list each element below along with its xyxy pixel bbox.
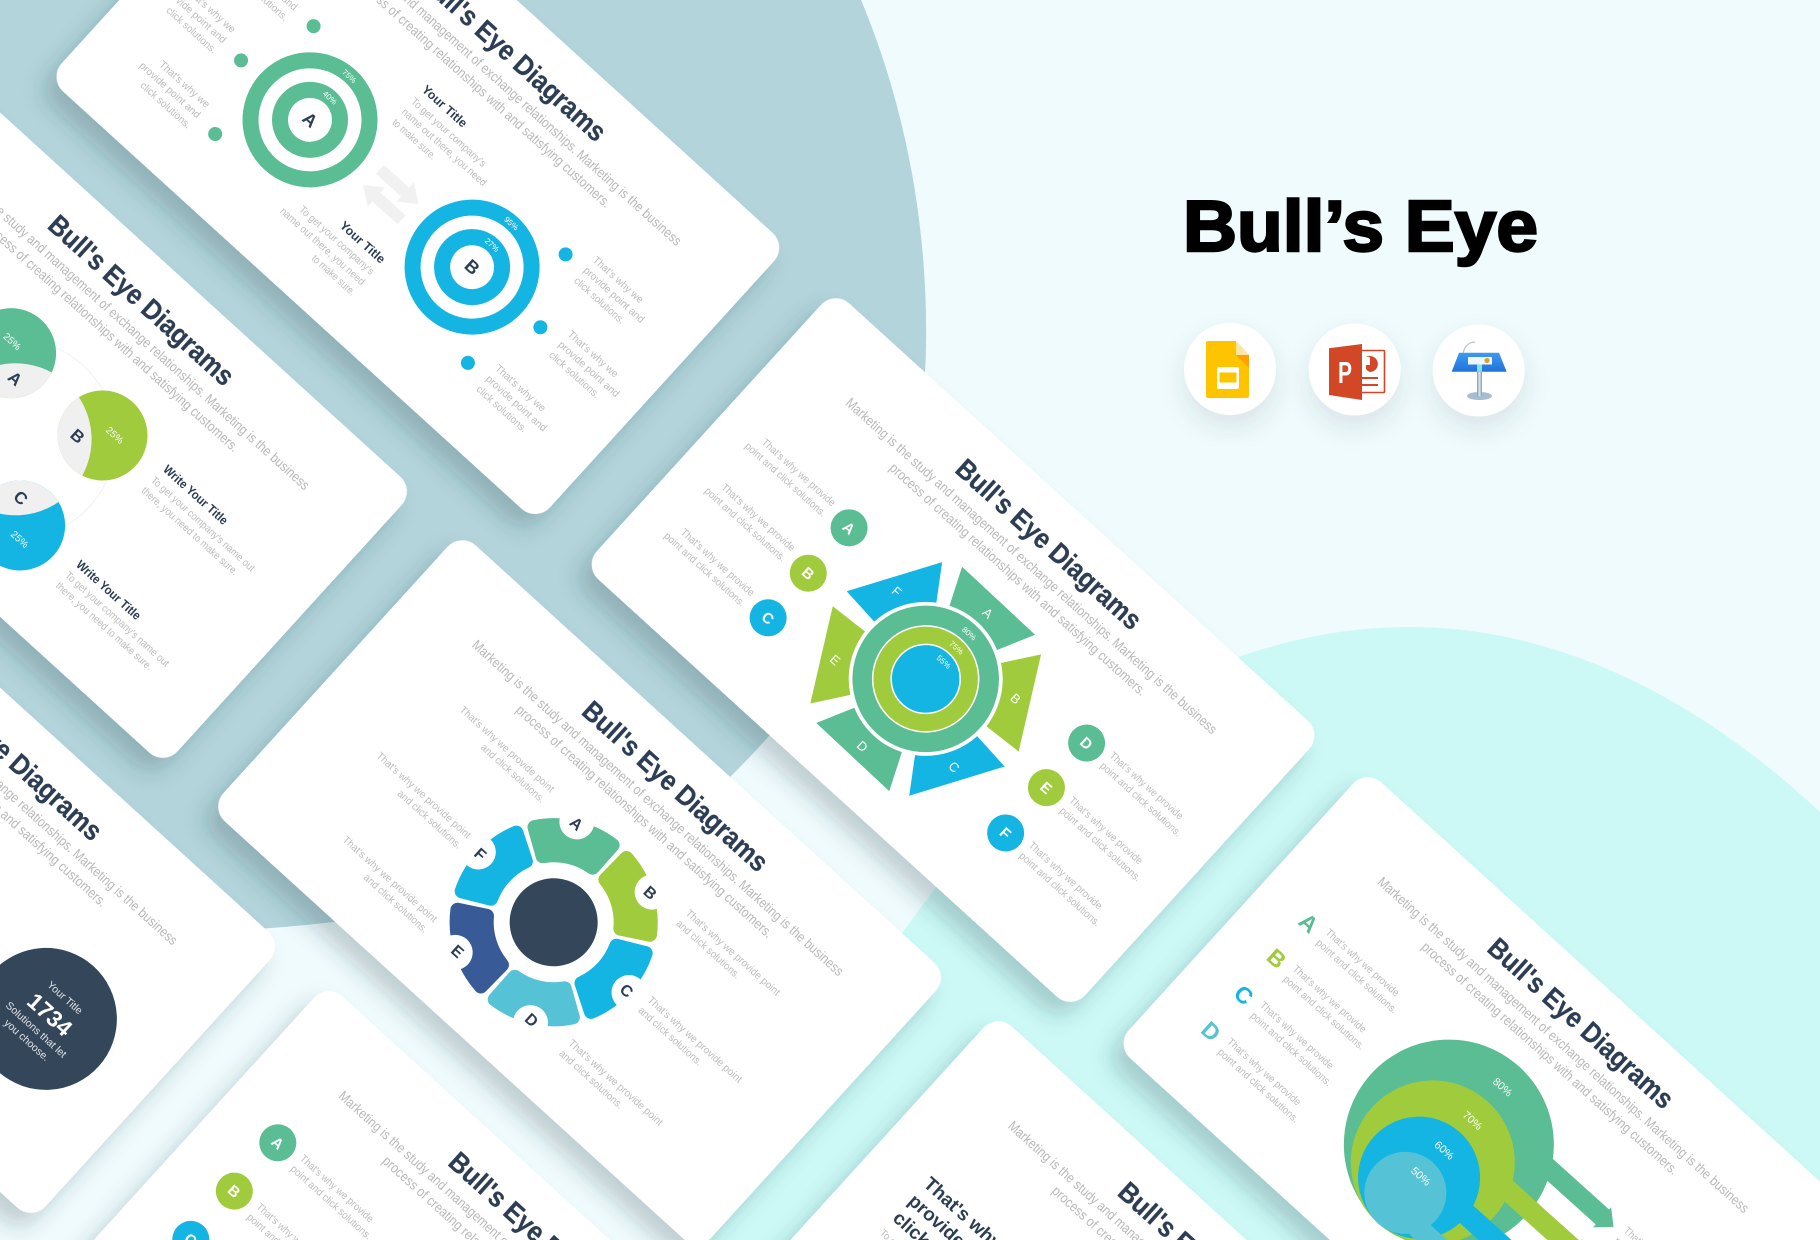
right text blocks: click solutions. <box>571 275 627 327</box>
write your title 2: To get your company's name out <box>63 570 172 670</box>
left text blocks: provide point and <box>137 60 203 121</box>
sunburst chart: A <box>979 605 996 622</box>
pie B: 25% <box>103 425 125 447</box>
right text blocks: provide point and <box>581 265 647 326</box>
sunburst chart: 55% <box>935 653 953 671</box>
ring diagram: A <box>566 814 586 835</box>
right text blocks <box>556 907 805 1159</box>
slide subtitle: Marketing is the study and management of exchange relationships. Marketing is the business <box>469 637 847 979</box>
badge A <box>823 502 875 554</box>
right text blocks: provide point and <box>556 339 622 400</box>
panel: slide with pie circles <box>0 112 407 778</box>
left text blocks: That's why we provide <box>719 482 797 554</box>
panel: slide with two targets <box>46 0 790 524</box>
card background <box>1115 769 1820 1240</box>
badge B <box>208 1165 260 1217</box>
right text blocks: That's why we <box>565 328 621 380</box>
callout: your title left: name out there, you need <box>277 205 367 288</box>
ring diagram <box>392 762 715 1083</box>
right text blocks: point and click solutions. <box>1057 805 1143 884</box>
right text blocks: That's why we provide <box>1066 795 1145 867</box>
callout: your title left: To get your company's <box>296 204 377 277</box>
right text blocks: That's why we provide <box>1107 750 1186 822</box>
card background <box>210 532 949 1240</box>
icon: powerpoint: P <box>1338 355 1352 390</box>
left text blocks: point and click solutions. <box>742 440 828 519</box>
left text blocks: That's why we provide <box>759 437 838 509</box>
right text blocks: click solutions. <box>474 383 529 435</box>
legend text: point and click solutions. <box>1248 1010 1334 1089</box>
right text blocks: and click solutions. <box>636 1005 705 1068</box>
right text blocks: provide point and <box>483 373 549 434</box>
left text blocks: point and click solutions. <box>702 485 788 564</box>
left text blocks: point and click solutions. <box>661 530 747 609</box>
right text blocks: That's why we provide point <box>683 907 782 999</box>
panel: slide with nested circles and arrows <box>1113 768 1820 1240</box>
slide title: Bull's Eye Diagrams <box>1482 932 1680 1115</box>
right text blocks: point and click solutions. <box>1017 850 1103 929</box>
blue dots <box>458 245 598 393</box>
right text blocks: click solutions. <box>546 349 602 401</box>
slide subtitle: Marketing is the study and management of exchange relationships. Marketing is the business <box>843 395 1221 737</box>
badge text blocks: That's why we provide <box>297 1153 376 1225</box>
legend text: That's why we provide <box>1323 927 1402 999</box>
callout: your title left: to make sure. <box>309 253 358 298</box>
left text blocks <box>308 683 557 936</box>
faint ring <box>0 298 157 581</box>
card background <box>48 0 787 522</box>
badge A: A <box>267 1134 287 1154</box>
badge B: B <box>224 1182 243 1202</box>
panel: slide with sunburst diagram <box>581 289 1325 1011</box>
card background <box>0 46 415 766</box>
right text blocks <box>474 254 679 465</box>
target B: 95% <box>502 215 520 232</box>
left text blocks: and click solutions. <box>361 872 430 936</box>
badge F: F <box>996 824 1014 843</box>
write your title 2: there, you need to make sure. <box>53 580 155 673</box>
slide title: Bull's Eye Diagrams <box>950 453 1148 636</box>
legend text: That's why we provide <box>1224 1036 1303 1108</box>
large callout <box>877 1174 1052 1240</box>
badge A <box>252 1117 304 1169</box>
badge B <box>782 547 834 599</box>
right text blocks: That's why we <box>492 363 548 414</box>
write your title 1: there, you need to make sure. <box>139 485 240 578</box>
target A: 75% <box>340 68 358 85</box>
slide subtitle <box>0 606 181 962</box>
callout: your title left <box>268 182 388 298</box>
pie A: A <box>4 368 26 390</box>
sunburst chart: 80% <box>960 625 978 643</box>
target A: A <box>298 108 322 132</box>
right text blocks: That's why we provide point <box>566 1037 665 1129</box>
background blob: mint <box>700 627 1820 1240</box>
callout: your title left: Your Title <box>337 218 388 266</box>
stat circle <box>0 919 146 1119</box>
icon: powerpoint <box>1309 324 1401 416</box>
left text blocks: and click solutions. <box>478 742 547 805</box>
pie B: B <box>66 425 88 448</box>
badge E <box>1020 762 1073 814</box>
right text blocks: and click solutions. <box>556 1048 625 1112</box>
legend letters: C <box>1229 980 1259 1010</box>
card background <box>76 983 816 1240</box>
green dots <box>183 0 323 145</box>
slide subtitle: process of creating relationships with and satisfying customers. <box>513 701 776 941</box>
slide title: Bull's Eye Diagrams <box>576 695 775 878</box>
stat circle: you choose. <box>1 1017 52 1064</box>
panel: slide with dark stat circle <box>0 500 285 1222</box>
legend letters: A <box>1294 908 1324 938</box>
sunburst chart: F <box>889 583 905 600</box>
write your title 1: Write Your Title <box>160 462 231 528</box>
nested circle chart with arrows: 60% <box>1432 1139 1456 1163</box>
nested circle chart with arrows: 70% <box>1460 1109 1484 1133</box>
stat circle: 1734 <box>22 988 78 1041</box>
pie B <box>58 390 148 480</box>
nested circle chart with arrows <box>1300 996 1651 1240</box>
callout: your title right <box>390 82 510 199</box>
stat circle: Solutions that let <box>3 1000 69 1061</box>
callout: your title right: To get your company's <box>408 96 488 170</box>
panel: slide with lettered badges bottom <box>74 982 818 1240</box>
ring diagram: C <box>616 981 636 1002</box>
badge B: B <box>798 564 817 584</box>
badge F <box>980 807 1032 859</box>
background blob: teal circle <box>0 0 926 945</box>
left text blocks: and click solutions. <box>395 788 464 852</box>
legend letters: B <box>1262 943 1291 974</box>
right text blocks: point and click solutions. <box>1098 760 1184 839</box>
badge text blocks <box>201 1153 383 1240</box>
arrows between targets <box>354 158 427 231</box>
left text blocks: click solutions. <box>164 5 219 56</box>
sunburst chart: 75% <box>947 639 965 657</box>
sunburst chart: B <box>1007 690 1024 707</box>
card background <box>583 290 1323 1010</box>
pie C <box>0 480 66 570</box>
legend letters <box>1196 908 1324 1047</box>
target B: 27% <box>483 236 501 254</box>
panel: slide with gear ring diagram <box>208 531 951 1240</box>
slide subtitle: process of creating relationships with and satisfying customers. <box>886 459 1150 699</box>
left text blocks: click solutions. <box>138 80 193 131</box>
badge E: E <box>1036 779 1055 798</box>
pie A: 25% <box>0 331 23 353</box>
main title: Bull’s Eye <box>1183 187 1538 267</box>
card background <box>746 1013 1485 1240</box>
badge C <box>742 592 794 644</box>
pie C: C <box>10 487 31 509</box>
legend text: point and click solutions. <box>1313 937 1400 1016</box>
ring diagram: E <box>447 942 467 962</box>
legend text: point and click solutions. <box>1281 973 1367 1053</box>
legend letters: D <box>1196 1016 1226 1047</box>
legend text: That's why we provide <box>1257 999 1336 1072</box>
pie C: 25% <box>8 529 30 551</box>
callout: your title right: to make sure. <box>390 117 439 162</box>
badge C <box>165 1213 217 1240</box>
icon: google slides <box>1184 323 1276 415</box>
target A <box>215 25 405 215</box>
icon: keynote <box>1433 324 1525 416</box>
left text blocks: That's why we provide point <box>457 704 557 795</box>
nested circle chart with arrows: 50% <box>1408 1165 1433 1189</box>
badge C: C <box>758 609 777 629</box>
callout: your title right: Your Title <box>419 82 470 130</box>
panel: slide with large callout text bottom <box>744 1012 1487 1240</box>
sunburst chart: D <box>854 738 871 755</box>
right text blocks <box>1017 750 1193 929</box>
badge D <box>1060 717 1113 769</box>
left text blocks: That's why we provide point <box>340 834 439 925</box>
badge A: A <box>839 519 858 539</box>
badge D: D <box>1076 734 1096 754</box>
slide subtitle: process of creating relationships with and satisfying customers. <box>1418 938 1682 1178</box>
left text blocks: That's why we provide <box>678 526 757 599</box>
ring diagram: D <box>521 1011 541 1031</box>
sunburst chart: E <box>827 651 844 669</box>
nested circle chart with arrows: 80% <box>1490 1076 1515 1100</box>
right text blocks: That's why we <box>590 254 646 306</box>
card background <box>0 501 283 1221</box>
legend text: point and click solutions. <box>1215 1046 1301 1125</box>
ring diagram: F <box>470 845 489 865</box>
write your title 2: Write Your Title <box>73 558 144 623</box>
legend text <box>1215 927 1409 1125</box>
sunburst chart: C <box>946 758 963 776</box>
left text blocks <box>661 430 838 609</box>
pie A <box>0 308 56 398</box>
ring diagram: B <box>640 883 660 904</box>
stat circle: Your Title <box>44 979 85 1017</box>
target A: 40% <box>321 89 339 107</box>
left text blocks <box>104 0 309 131</box>
right text blocks: and click solutions. <box>674 918 743 981</box>
legend text: That's why we provide <box>1290 963 1369 1036</box>
target B: B <box>461 255 484 279</box>
sunburst chart <box>766 520 1085 838</box>
slide title: Bull's Eye Diagrams <box>42 209 241 392</box>
callout: your title right: name out there, you need <box>399 106 489 189</box>
target B <box>377 172 567 362</box>
right text blocks: That's why we provide <box>1026 840 1105 912</box>
left text blocks: That's why we provide point <box>374 750 473 841</box>
left text blocks: That's why we <box>156 59 212 111</box>
write your title 1: To get your company's name out <box>148 474 257 574</box>
right text blocks: That's why we provide point <box>645 994 744 1085</box>
